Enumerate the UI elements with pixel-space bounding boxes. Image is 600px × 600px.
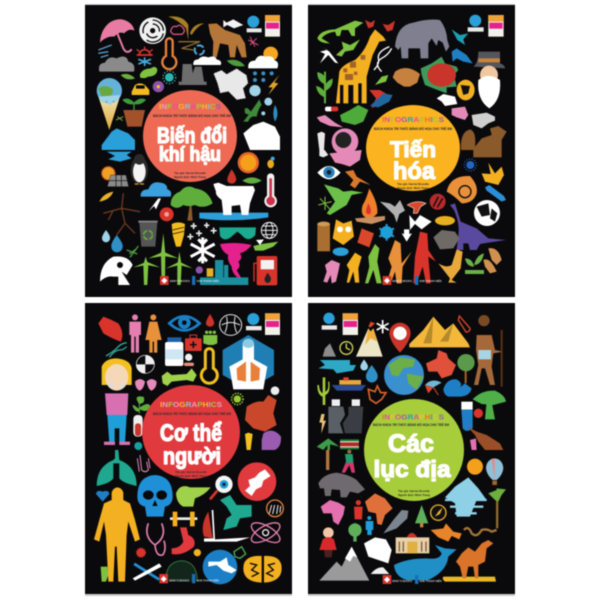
icon: antarctica <box>243 122 280 150</box>
author credits <box>398 489 430 497</box>
icon: rock <box>433 230 459 249</box>
icon: kidneys <box>135 379 157 391</box>
infographics wordmark: INFOGRAPHICS <box>382 115 444 124</box>
icon: fuel pump <box>254 256 277 285</box>
icon: rat <box>437 94 457 106</box>
icon: teal bird <box>452 29 468 45</box>
lower icons evolution <box>317 150 506 285</box>
icon: sunglasses <box>219 227 256 239</box>
logo: age badge <box>488 15 504 37</box>
icon: eye <box>167 315 202 332</box>
icon: frog <box>340 105 368 125</box>
icon: rhino <box>318 473 365 497</box>
title circle yellow <box>366 105 460 191</box>
icon: building <box>396 533 429 553</box>
icon: pink salamander <box>317 115 343 127</box>
icon: car <box>132 83 149 95</box>
icon: city <box>200 260 248 285</box>
icon: cracks <box>103 193 140 235</box>
icon: palm trunk <box>326 450 329 470</box>
icon: blue circle <box>203 550 237 584</box>
icon: umbrella <box>425 380 442 395</box>
icon: yellow leaf <box>99 192 113 202</box>
icon: clock <box>340 342 353 354</box>
icon: yellow gear <box>194 549 201 556</box>
upper icons continents <box>317 313 506 450</box>
publisher logos: NXB THANH NIÊN <box>197 278 219 283</box>
icon: insect small <box>116 117 123 121</box>
icon: blue person <box>366 516 373 535</box>
icon: light bulb <box>172 222 185 247</box>
icon: giraffe <box>336 29 386 103</box>
icon: monkey lower <box>473 150 502 157</box>
icon: thermometer <box>162 38 176 69</box>
icon: orange africa <box>365 493 393 525</box>
icon: dragonfly <box>320 47 338 63</box>
figure: aboriginal man <box>474 315 503 385</box>
icon: wave <box>443 379 472 397</box>
icon: quarter circle <box>136 355 155 374</box>
icon: mushrooms <box>407 202 426 213</box>
icon: seal <box>383 510 408 533</box>
logo: globe badge <box>468 15 484 32</box>
icon: red book <box>357 228 374 247</box>
icon: grey animal <box>380 200 405 223</box>
icon: bone <box>317 132 325 150</box>
icon: teal blob <box>134 442 142 450</box>
subtitle: BÁCH KHOA TRI THỨC BẰNG ĐỒ HỌA CHO TRẺ EM <box>153 411 231 416</box>
icon: iceberg <box>445 477 487 517</box>
panel: book cover Các lục địa <box>308 303 515 596</box>
icon: thermometer <box>201 349 217 383</box>
icon: camel <box>456 540 493 578</box>
icon: iceberg <box>102 128 135 150</box>
icon: hurricane spiral <box>139 17 166 44</box>
icon: recycle <box>195 45 204 55</box>
logo: globe badge <box>322 313 337 330</box>
icon: test tube <box>133 415 143 437</box>
author credits: Người dịch: Minh Trang <box>175 474 207 478</box>
icon: heart <box>98 317 122 342</box>
icon: log <box>317 222 330 251</box>
icon: penguin <box>131 154 148 185</box>
icon: monkey <box>461 126 507 150</box>
icon: walking stick <box>501 330 503 387</box>
icon: small green bird <box>375 75 388 85</box>
icon: melting earth cone <box>97 78 122 130</box>
publisher logos <box>160 276 219 285</box>
icon: dna <box>106 343 127 357</box>
icon: savanna tree <box>473 391 506 419</box>
icon: storm cloud <box>141 182 171 212</box>
icon: white cloud <box>193 57 221 65</box>
icon: pill <box>325 107 338 111</box>
icon: pills <box>184 354 194 366</box>
icon: pink creature <box>452 107 468 120</box>
icon: lightning <box>319 414 326 433</box>
icon: fossil skull <box>472 113 495 128</box>
title circle red <box>142 385 240 479</box>
icon: elephant <box>395 20 449 58</box>
icon: blue virus <box>464 159 476 171</box>
publisher logos: NXB THANH NIÊN <box>419 578 442 583</box>
logo: age badge <box>265 15 280 37</box>
icon: green people <box>203 331 217 345</box>
icon: rock <box>323 343 336 357</box>
icon: ice glass <box>461 402 473 431</box>
icon: thermometer <box>458 316 470 332</box>
icon: brain head lower <box>329 150 362 167</box>
icon: sun and frost <box>137 47 153 66</box>
author credits <box>397 182 429 190</box>
icon: water ripple <box>107 152 132 162</box>
publisher logos: NXB THANH NIÊN <box>419 278 442 283</box>
title line 2: hóa <box>393 158 436 185</box>
icon: ammonite <box>447 176 477 203</box>
icon: pill bottle <box>165 337 183 366</box>
icon: blue heart <box>96 491 109 502</box>
logo: age badge <box>343 313 358 335</box>
title line 2: người <box>163 443 221 469</box>
icon: power plant <box>179 64 207 85</box>
panel: book cover Biến đổi khí hậu <box>85 4 292 297</box>
icon: green bird <box>336 39 360 57</box>
icon: bubbles <box>249 85 272 115</box>
icon: location pin <box>389 323 411 353</box>
title line 1: Biến đổi <box>157 123 227 148</box>
icon: white cell <box>271 386 279 395</box>
author credits <box>174 171 206 179</box>
icon: bee <box>267 157 275 168</box>
logo: age badge <box>265 313 280 335</box>
icon: turtle <box>421 57 458 93</box>
icon: eye <box>317 166 341 179</box>
icon: foot <box>101 567 108 582</box>
icon: blue fish <box>452 48 473 63</box>
subtitle: BÁCH KHOA TRI THỨC BẰNG ĐỒ HỌA CHO TRẺ EM <box>374 126 452 131</box>
icon: red birds <box>365 20 395 32</box>
figure: early hominid <box>347 253 362 283</box>
author credits: Tác giả: Harriet Brundle <box>174 171 206 175</box>
icon: yellow bone <box>245 433 253 450</box>
icon: lizard <box>317 21 363 43</box>
icon: wind turbines <box>133 233 193 285</box>
icon: hexagon anatomy <box>223 335 274 389</box>
icon: hair follicle <box>267 500 283 517</box>
infographics wordmark: INFOGRAPHICS <box>159 102 221 111</box>
icon: footprint yellow <box>482 163 504 185</box>
figure: neanderthal <box>365 244 382 283</box>
icon: red gear <box>137 548 145 557</box>
title line 1: Cơ thể <box>160 420 222 447</box>
icon: leaf branch <box>243 99 262 122</box>
icon: pink continent top <box>470 438 477 450</box>
icon: virus <box>163 71 176 84</box>
icon: purple flower small <box>196 266 203 274</box>
icon: blue snowflake <box>379 224 394 241</box>
figure: modern human <box>413 232 436 283</box>
icon: blue drops <box>360 359 378 382</box>
icon: owl <box>333 219 354 245</box>
icon: nerve <box>137 455 150 472</box>
icon: tornado <box>220 243 252 282</box>
icon: red stomach <box>172 527 195 554</box>
icon: first aid kit <box>185 335 202 351</box>
icon: stomach purple <box>262 431 281 450</box>
icon: dog head <box>393 68 420 87</box>
icon: recycling bin <box>138 221 158 247</box>
icon: purple dinosaur <box>450 203 506 250</box>
icon: stethoscope <box>147 523 165 555</box>
figure: boy <box>319 527 337 557</box>
icon: darwin <box>473 52 505 108</box>
icon: globe <box>474 200 500 226</box>
icon: rain drops <box>253 71 274 82</box>
icon: bat badge <box>457 80 475 100</box>
icon: cactus <box>317 377 330 405</box>
icon: fish skeleton <box>409 215 432 230</box>
icon: sea <box>318 360 356 373</box>
icon: footprint <box>140 67 157 78</box>
icon: sprout <box>465 253 484 274</box>
icon: pine tree <box>415 505 428 527</box>
icon: wind <box>98 45 112 57</box>
icon: antarctica <box>364 537 392 563</box>
icon: brain head pink <box>332 128 358 155</box>
icon: green leaf <box>242 177 262 184</box>
icon: joint circle <box>238 462 276 501</box>
icon: lightning <box>268 75 279 95</box>
icon: tree <box>171 186 213 221</box>
lower icons body <box>94 450 283 584</box>
icon: pink cloud <box>171 25 184 34</box>
evolution figures <box>323 232 436 283</box>
icon: round tree <box>457 354 475 383</box>
infographics wordmark: INFOGRAPHICS <box>382 412 444 422</box>
icon: ship <box>332 377 366 391</box>
upper icons evolution <box>317 15 507 155</box>
logo: globe badge <box>246 313 262 330</box>
icon: skull <box>137 475 173 517</box>
author credits: Người dịch: Minh Trang <box>397 186 429 190</box>
icon: blue drops <box>102 230 123 252</box>
icon: hen <box>438 249 463 283</box>
icon: pyramids <box>409 317 470 347</box>
icon: thermometer white <box>264 173 277 207</box>
icon: dark brain <box>166 561 197 582</box>
publisher logos: ĐINH TỊ BOOKS <box>169 578 189 582</box>
icon: plant <box>133 397 150 413</box>
title line 1: Tiến <box>390 137 436 162</box>
icon: atom <box>248 519 283 546</box>
icon: dna <box>374 47 392 72</box>
figure: homo erectus <box>387 240 412 283</box>
icon: intestine <box>245 395 277 432</box>
icon: snake <box>464 528 497 535</box>
panel: book cover Tiến hóa <box>308 4 515 297</box>
icon: footprints <box>483 248 502 273</box>
author credits: Người dịch: Minh Trang <box>398 493 430 497</box>
publisher logos: ĐINH TỊ BOOKS <box>170 279 190 283</box>
author credits: Người dịch: Minh Trang <box>174 175 206 179</box>
icon: campfire <box>355 188 385 224</box>
icon: snowflake <box>377 320 389 333</box>
icon: palm <box>317 438 339 450</box>
icon: green virus <box>232 393 243 405</box>
icon: arm muscle <box>203 510 250 542</box>
icon: tiger <box>208 23 247 57</box>
icon: fish skeleton <box>223 19 243 28</box>
icon: orange fish <box>431 523 462 542</box>
author credits: Tác giả: Harriet Brundle <box>175 470 207 474</box>
lower icons climate <box>99 152 278 285</box>
icon: wave and house <box>100 256 133 285</box>
icon: bone end <box>319 150 328 157</box>
icon: dragonfly <box>127 246 138 257</box>
icon: yellow brain <box>243 556 282 583</box>
icon: sun over cloud <box>248 47 278 68</box>
icon: small snowflakes <box>187 223 217 240</box>
title line 2: lục địa <box>374 456 451 482</box>
icon: blood drop <box>206 314 214 327</box>
icon: blue fish <box>273 105 277 122</box>
title line 1: Các <box>388 430 434 458</box>
icon: purple flower <box>153 81 164 92</box>
icon: sun <box>467 459 483 475</box>
icon: teal intestine <box>220 495 252 530</box>
icon: arrow <box>402 229 412 242</box>
publisher logos: ĐINH TỊ BOOKS <box>392 579 412 583</box>
title line 2: khí hậu <box>159 144 221 166</box>
icon: big snowflake <box>191 237 215 263</box>
icon: green outline <box>234 547 246 558</box>
figure: ape <box>323 260 340 283</box>
subtitle: BÁCH KHOA TRI THỨC BẰNG ĐỒ HỌA CHO TRẺ EM <box>373 422 449 427</box>
publisher logos <box>159 574 219 583</box>
icon: blue microbe <box>333 247 349 256</box>
icon: red flower <box>160 207 174 221</box>
icon: australia <box>426 350 456 378</box>
icon: apple <box>474 409 483 418</box>
icon: small white mountain <box>371 567 389 574</box>
icon: maple leaf <box>368 386 386 403</box>
icon: compass <box>431 505 446 520</box>
icon: palm tree <box>488 488 506 528</box>
icon: bone <box>162 368 197 386</box>
icon: plant pot <box>123 99 145 127</box>
icon: green tree <box>348 523 362 542</box>
icon: hand with leaf <box>253 239 278 251</box>
icon: pancreas <box>176 486 211 507</box>
publisher logos: ĐINH TỊ BOOKS <box>392 279 412 283</box>
icon: green insect <box>318 197 332 210</box>
icon: broken cliff <box>328 399 363 433</box>
figure: human silhouette <box>94 487 140 582</box>
icon: colourful bird <box>369 90 393 108</box>
subtitle: BÁCH KHOA TRI THỨC BẰNG ĐỒ HỌA CHO TRẺ EM <box>153 113 231 118</box>
icon: whale <box>394 545 457 580</box>
icon: pink africa <box>321 500 345 525</box>
logo: globe badge <box>247 16 262 32</box>
icon: yellow caterpillar <box>435 216 455 225</box>
publisher logos: NXB THANH NIÊN <box>197 577 219 582</box>
lower icons continents <box>318 450 506 584</box>
icon: blue bone <box>485 185 506 202</box>
title circle coral <box>143 90 237 182</box>
icon: hummingbird <box>324 184 363 215</box>
publisher logos <box>383 575 442 584</box>
icon: grey cloud <box>99 56 134 72</box>
icon: man pink <box>129 314 141 353</box>
icon: mountains <box>319 547 369 581</box>
icon: flag <box>340 439 359 449</box>
author credits: Tác giả: Harriet Brundle <box>397 182 429 186</box>
icon: woman orange <box>145 314 162 353</box>
icon: hiker <box>342 450 355 473</box>
icon: blue white bone <box>133 563 162 581</box>
icon: dumbbell <box>170 512 197 526</box>
upper icons body <box>98 313 281 450</box>
upper icons climate <box>97 15 280 150</box>
icon: hot air balloon <box>486 458 503 485</box>
icon: earth <box>384 355 424 395</box>
title circle lime <box>364 399 464 501</box>
icon: magnifier eye <box>210 476 233 499</box>
icon: green leaf small <box>121 74 135 79</box>
icon: brain outline <box>220 315 242 335</box>
icon: volcano <box>356 322 383 357</box>
icon: solar panel with sun <box>102 167 129 187</box>
icon: sand <box>443 577 496 582</box>
icon: red drop <box>227 169 236 184</box>
icon: leaf <box>227 60 245 67</box>
infographics wordmark: INFOGRAPHICS <box>160 400 222 409</box>
icon: insect <box>248 37 258 47</box>
icon: striped circle <box>430 194 446 210</box>
author credits <box>175 470 207 478</box>
icon: coral <box>213 68 248 100</box>
figure: girl <box>102 358 132 445</box>
panel: book cover Cơ thể người <box>85 303 292 596</box>
icon: orange dino skeleton <box>345 170 371 188</box>
icon: polar bear on ice <box>199 183 268 220</box>
icon: umbrella <box>100 19 134 52</box>
icon: red person <box>354 500 363 519</box>
icon: kangaroo <box>467 427 503 450</box>
publisher logos <box>383 276 442 285</box>
author credits: Tác giả: Harriet Brundle <box>398 489 430 493</box>
icon: plant <box>317 72 332 103</box>
icon: globe wire <box>261 222 277 238</box>
icon: wilted plant <box>168 16 204 50</box>
icon: orange sun <box>238 152 259 173</box>
icon: lungs <box>97 450 137 486</box>
